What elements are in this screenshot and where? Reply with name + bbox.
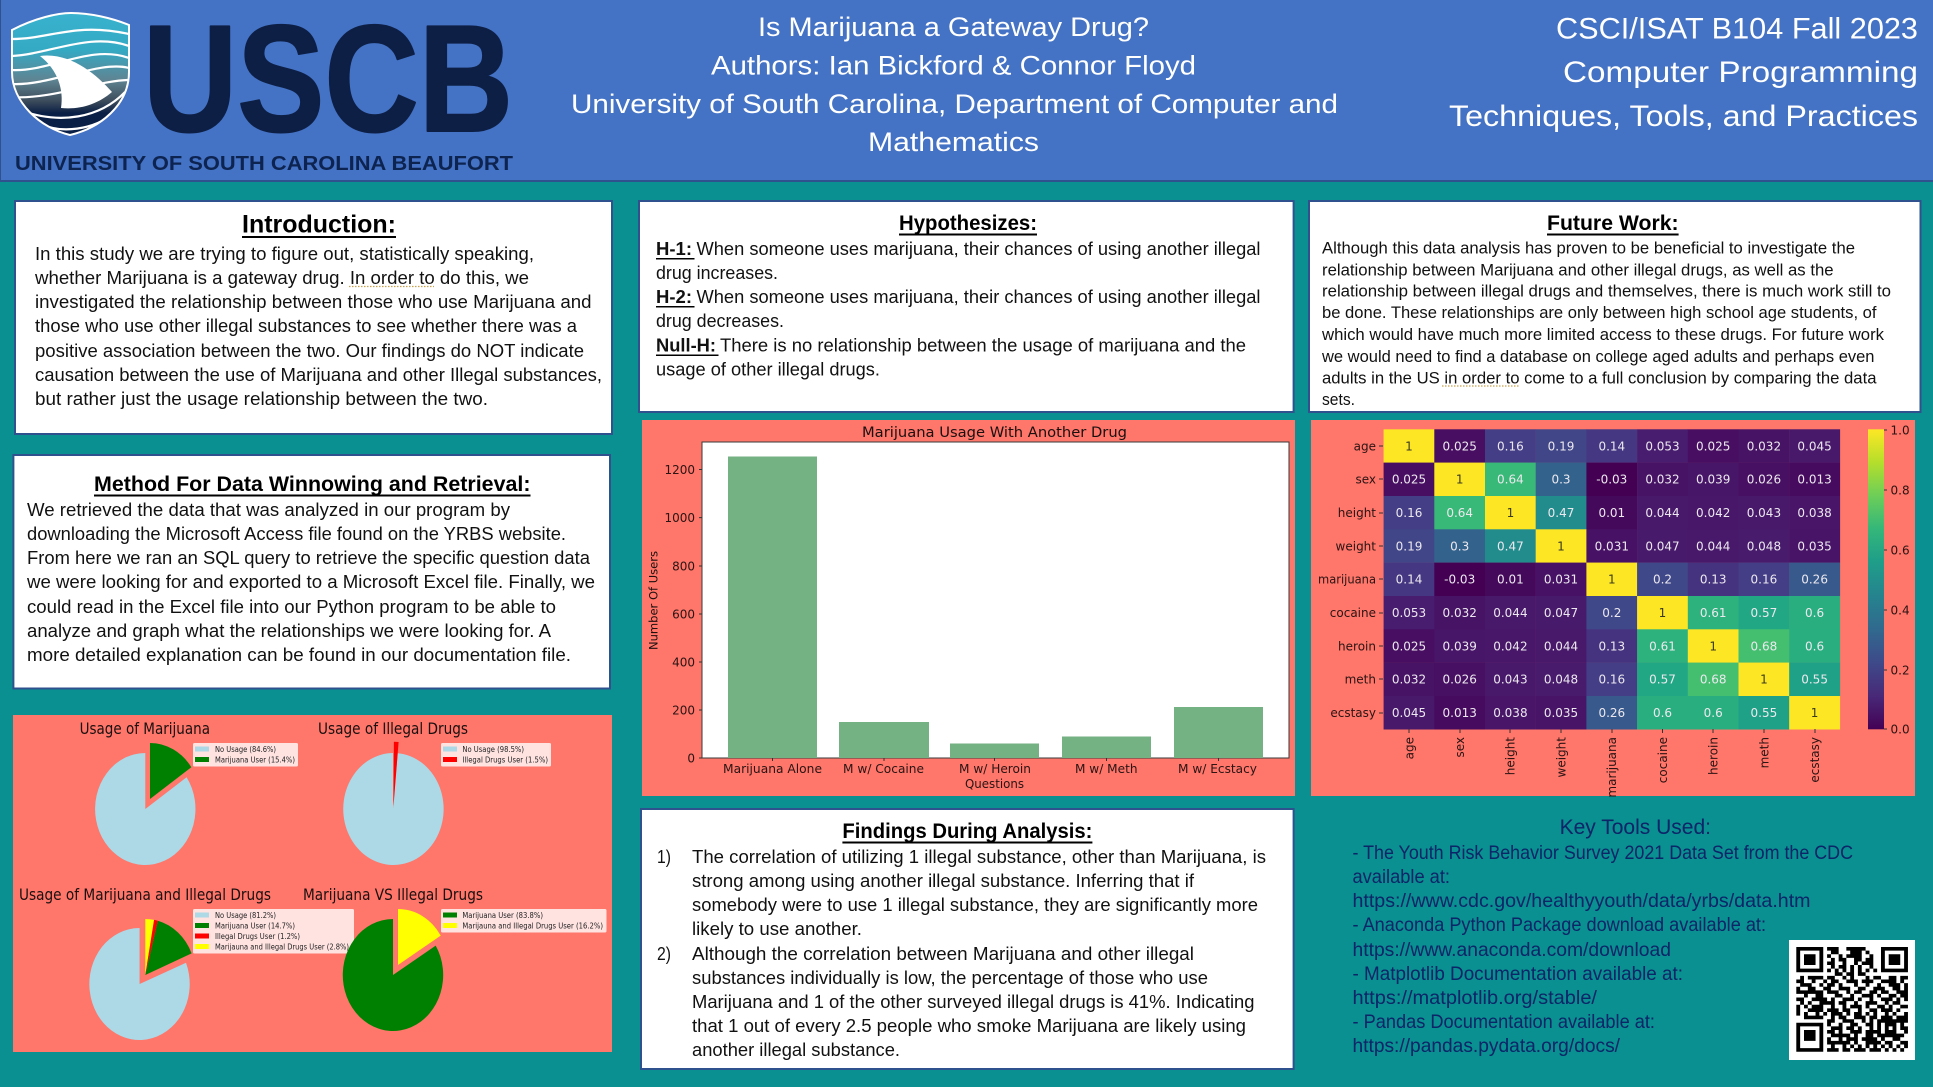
heatmap cells: 0.026 (1747, 473, 1781, 487)
method text: could read in the Excel file into our Python program to be able to (27, 596, 556, 617)
method text: analyze and graph what the relationships we were looking for. A (27, 620, 552, 641)
legend: usage of marijuana and illegal drugs: Illegal Drugs User (1.2%) (215, 932, 300, 941)
findings item 2: that 1 out of every 2.5 people who smoke Marijuana are likely using (692, 1015, 1246, 1036)
heatmap cells: 1 (1405, 439, 1413, 453)
heatmap cells: 0.039 (1443, 639, 1477, 653)
title and authors (571, 12, 1338, 157)
heatmap cells: 0.01 (1497, 573, 1524, 587)
heatmap color bar: 0.8 (1890, 484, 1910, 498)
heatmap cells: 0.044 (1645, 506, 1680, 520)
pie chart: marijuana vs illegal drugs (303, 885, 606, 1031)
hypotheses text: When someone uses marijuana, their chances of using another illegal (696, 238, 1260, 259)
heatmap cells: 0.044 (1696, 539, 1730, 553)
legend: usage of illegal drugs (441, 743, 551, 766)
heatmap cells: 0.035 (1797, 539, 1832, 553)
header banner (0, 0, 1933, 182)
heatmap cells: 0.2 (1602, 606, 1621, 620)
y axis labels: 200 (672, 704, 695, 718)
y axis labels: 0 (687, 752, 695, 766)
heatmap cells: 0.2 (1653, 573, 1672, 587)
tools list: https://pandas.pydata.org/docs/ (1352, 1035, 1621, 1057)
heatmap cells: 0.013 (1797, 473, 1832, 487)
heatmap color bar: 0.6 (1890, 544, 1910, 558)
y axis labels (664, 463, 695, 766)
panel: method (13, 455, 610, 688)
heatmap color bar: 0.0 (1890, 722, 1910, 736)
heatmap row labels: marijuana (1318, 573, 1376, 587)
method text: more detailed explanation can be found in our documentation file. (27, 644, 571, 665)
heatmap cells: 1 (1709, 639, 1717, 653)
title and authors: University of South Carolina, Department of Computer and (571, 89, 1338, 119)
bar chart plot area (699, 442, 1289, 761)
heatmap cells: 0.6 (1653, 706, 1672, 720)
method text (26, 499, 595, 665)
findings item 2: substances individually is low, the percentage of those who use (692, 967, 1208, 988)
findings item 2 (657, 943, 1254, 1060)
x axis labels: M w/ Cocaine (843, 762, 924, 776)
heatmap cells: 0.14 (1598, 439, 1625, 453)
heatmap row labels: heroin (1338, 639, 1376, 653)
heading: hypotheses: Hypothesizes: (899, 212, 1037, 235)
y axis labels: 1200 (664, 463, 695, 477)
heatmap cells: 0.053 (1392, 606, 1426, 620)
heatmap cells: 0.68 (1751, 639, 1777, 653)
heatmap cells: 0.26 (1598, 706, 1625, 720)
heatmap cells: 0.039 (1696, 473, 1730, 487)
introduction text: In this study we are trying to figure out, statistically speaking, (35, 243, 534, 264)
heatmap cells: 0.13 (1598, 639, 1625, 653)
heatmap column labels: height (1504, 737, 1518, 775)
heatmap cells: 0.038 (1493, 706, 1528, 720)
x axis labels: M w/ Ecstacy (1178, 762, 1257, 776)
findings item 2: Marijuana and 1 of the other surveyed illegal drugs is 41%. Indicating (692, 991, 1254, 1012)
heatmap cells: 0.57 (1649, 673, 1676, 687)
hypotheses text: Null-H: (656, 334, 716, 356)
introduction text: positive association between the two. Our findings do NOT indicate (35, 340, 584, 361)
course information (1449, 12, 1918, 133)
findings item 2: 2) (657, 943, 671, 964)
y axis labels: 600 (672, 608, 695, 622)
heatmap cells: 0.031 (1595, 539, 1629, 553)
method text: downloading the Microsoft Access file found on the YRBS website. (27, 523, 566, 544)
bars (728, 456, 1263, 758)
future work text (1321, 239, 1891, 409)
heatmap cells: 0.68 (1700, 673, 1727, 687)
heatmap cells: 0.044 (1544, 639, 1578, 653)
course information: Techniques, Tools, and Practices (1449, 100, 1918, 133)
heading: method: Method For Data Winnowing and Retrieval: (94, 472, 530, 496)
legend: usage of marijuana: No Usage (84.6%) (215, 745, 276, 754)
legend: marijuana vs illegal drugs (441, 909, 606, 932)
heatmap cells: 0.026 (1443, 673, 1477, 687)
y axis labels: 400 (672, 656, 695, 670)
heatmap cells: 1 (1456, 473, 1464, 487)
tools list: - Matplotlib Documentation available at: (1352, 963, 1683, 985)
heatmap cells: 0.57 (1751, 606, 1777, 620)
future work text: relationship between Marijuana and other illegal drugs, as well as the (1322, 261, 1834, 280)
future work text: Although this data analysis has proven to be beneficial to investigate the (1322, 239, 1855, 258)
heatmap cells: -0.03 (1444, 573, 1475, 587)
bar chart title: Marijuana Usage With Another Drug (862, 425, 1127, 441)
heatmap cells: 0.043 (1747, 506, 1781, 520)
legend: usage of illegal drugs: No Usage (98.5%) (462, 745, 524, 754)
heatmap cells: 0.16 (1497, 439, 1524, 453)
future work text: we would need to find a database on college aged adults and perhaps even (1321, 347, 1874, 366)
tools list: https://www.anaconda.com/download (1352, 939, 1671, 961)
logo subtitle: UNIVERSITY OF SOUTH CAROLINA BEAUFORT (15, 152, 513, 175)
title and authors: Is Marijuana a Gateway Drug? (758, 12, 1149, 42)
hypotheses text (656, 238, 1260, 380)
tools list: - Pandas Documentation available at: (1352, 1011, 1655, 1033)
hypotheses text: drug decreases. (656, 310, 784, 331)
heatmap cells: 1 (1760, 673, 1768, 687)
heatmap color bar: 1.0 (1890, 424, 1910, 438)
hypotheses text: When someone uses marijuana, their chances of using another illegal (696, 286, 1260, 307)
future work text: adults in the US in order to come to a full conclusion by comparing the data (1322, 369, 1877, 388)
heatmap row labels: age (1354, 439, 1376, 453)
heatmap cells: 0.048 (1544, 673, 1578, 687)
tools list: https://www.cdc.gov/healthyyouth/data/yrbs/data.htm (1352, 890, 1810, 912)
heatmap cells: 1 (1507, 506, 1514, 520)
x axis labels: Marijuana Alone (723, 762, 822, 776)
legend: marijuana vs illegal drugs: Marijauna and Illegal Drugs User (16.2%) (462, 922, 603, 931)
legend: usage of marijuana and illegal drugs: Marijuana User (14.7%) (215, 922, 295, 931)
x axis labels: M w/ Heroin (959, 762, 1031, 776)
legend: marijuana vs illegal drugs: Marijuana User (83.8%) (462, 911, 543, 920)
heatmap cells: 0.013 (1443, 706, 1477, 720)
heatmap cells: 0.19 (1396, 539, 1422, 553)
tools list: https://matplotlib.org/stable/ (1352, 987, 1598, 1009)
heatmap color bar: 0.2 (1890, 664, 1910, 678)
heatmap row labels: meth (1345, 673, 1376, 687)
heatmap cells: 0.55 (1751, 706, 1777, 720)
heatmap cells: 0.13 (1700, 573, 1727, 587)
heatmap cells: 0.025 (1443, 439, 1477, 453)
panel: future work (1309, 201, 1920, 412)
heatmap cells: 0.042 (1493, 639, 1528, 653)
heatmap cells: 0.044 (1493, 606, 1528, 620)
heading: introduction: Introduction: (242, 210, 396, 238)
heatmap cells: 0.16 (1396, 506, 1422, 520)
heatmap cells: -0.03 (1596, 473, 1627, 487)
heatmap cells: 0.053 (1645, 439, 1680, 453)
heatmap cells: 0.61 (1700, 606, 1727, 620)
introduction text: those who use other illegal substances to see whether there was a (35, 315, 578, 336)
heatmap column labels: ecstasy (1808, 737, 1822, 783)
future work text: which would have much more limited access to these drugs. For future work (1321, 325, 1884, 344)
heatmap cells: 0.045 (1797, 439, 1832, 453)
pie chart: marijuana vs illegal drugs: Marijuana VS Illegal Drugs (303, 885, 483, 904)
pie chart: usage of illegal drugs (318, 719, 551, 865)
introduction text: investigated the relationship between those who use Marijuana and (35, 291, 591, 312)
heatmap cells: 0.01 (1598, 506, 1625, 520)
introduction text (34, 243, 602, 409)
heatmap cells: 0.032 (1645, 473, 1680, 487)
panel: correlation heatmap (1311, 420, 1915, 798)
heatmap row labels: weight (1336, 539, 1376, 553)
pie chart: usage of marijuana (80, 719, 298, 865)
panel: key tools used (1352, 816, 1853, 1057)
heatmap cells: 0.55 (1801, 673, 1828, 687)
hypotheses text: drug increases. (656, 262, 778, 283)
tools list (1352, 842, 1853, 1057)
heatmap cells: 0.16 (1751, 573, 1777, 587)
heatmap column labels (1402, 737, 1822, 798)
heatmap column labels: heroin (1706, 737, 1720, 775)
future work text: sets. (1322, 390, 1355, 409)
findings item 2: another illegal substance. (692, 1039, 900, 1060)
heatmap row labels: sex (1355, 473, 1376, 487)
legend: usage of marijuana and illegal drugs (193, 909, 354, 954)
introduction text: but rather just the usage relationship between the two. (35, 388, 488, 409)
heatmap cells: 0.025 (1392, 473, 1426, 487)
heatmap cells: 0.032 (1747, 439, 1781, 453)
findings item 1: strong among using another illegal substance. Inferring that if (692, 870, 1195, 891)
legend: usage of illegal drugs: Illegal Drugs User (1.5%) (462, 756, 548, 764)
findings item 1 (657, 846, 1266, 939)
panel: bar chart (642, 420, 1295, 796)
heatmap cells: 0.19 (1548, 439, 1574, 453)
method text: We retrieved the data that was analyzed in our program by (27, 499, 511, 520)
method text: we were looking for and exported to a Microsoft Excel file. Finally, we (26, 571, 595, 592)
heatmap cells: 0.043 (1493, 673, 1528, 687)
findings item 1: The correlation of utilizing 1 illegal substance, other than Marijuana, is (692, 846, 1266, 867)
legend: usage of marijuana (193, 743, 298, 766)
legend: usage of marijuana: Marijuana User (15.4%) (215, 756, 295, 764)
title and authors: Authors: Ian Bickford & Connor Floyd (711, 50, 1196, 80)
heatmap row labels: cocaine (1330, 606, 1376, 620)
heatmap cells: 0.035 (1544, 706, 1578, 720)
pie chart: usage of marijuana and illegal drugs (19, 885, 354, 1040)
heatmap cells: 0.047 (1544, 606, 1578, 620)
heatmap cells: 0.025 (1696, 439, 1730, 453)
future work text: be done. These relationships are only between high school age students, of (1322, 303, 1877, 322)
panel: pie charts (13, 715, 612, 1052)
x axis labels: Questions (965, 777, 1024, 791)
heatmap row labels: height (1338, 506, 1376, 520)
heatmap cells: 0.048 (1747, 539, 1781, 553)
hypotheses text: usage of other illegal drugs. (656, 358, 880, 380)
course information: Computer Programming (1563, 56, 1918, 89)
heatmap cells: 0.64 (1446, 506, 1473, 520)
heatmap column labels: age (1402, 737, 1416, 759)
heatmap cells: 0.6 (1805, 639, 1824, 653)
findings item 1: 1) (657, 846, 671, 867)
heatmap cells: 0.6 (1704, 706, 1723, 720)
heading: future work: Future Work: (1547, 212, 1679, 235)
heatmap cells: 0.032 (1392, 673, 1426, 687)
pie chart: usage of marijuana: Usage of Marijuana (80, 719, 210, 738)
panel: hypotheses (639, 201, 1294, 412)
heatmap column labels: marijuana (1605, 737, 1619, 798)
x axis labels: M w/ Meth (1075, 762, 1138, 776)
heatmap row labels: ecstasy (1330, 706, 1376, 720)
legend: usage of marijuana and illegal drugs: No Usage (81.2%) (215, 911, 276, 920)
findings item 1: likely to use another. (692, 918, 862, 939)
icon: QR code (1789, 940, 1915, 1060)
panel: introduction (15, 201, 612, 434)
findings item 1: somebody were to use 1 illegal substance, they are significantly more (692, 894, 1258, 915)
x axis labels (723, 762, 1257, 791)
y axis labels: 1000 (664, 511, 695, 525)
heatmap cells: 0.3 (1551, 473, 1571, 487)
heatmap cells: 0.47 (1497, 539, 1524, 553)
heading: findings: Findings During Analysis: (842, 820, 1092, 843)
heatmap cells: 1 (1557, 539, 1565, 553)
future work text: relationship between illegal drugs and themselves, there is much work still to (1322, 282, 1891, 300)
findings item 2: Although the correlation between Marijuana and other illegal (692, 943, 1194, 964)
heatmap cells: 0.032 (1443, 606, 1477, 620)
y axis labels: 800 (672, 560, 695, 574)
heatmap cells (1384, 429, 1840, 730)
course information: CSCI/ISAT B104 Fall 2023 (1556, 12, 1918, 46)
introduction text: whether Marijuana is a gateway drug. In order to do this, we (34, 267, 529, 288)
hypotheses text: There is no relationship between the usage of marijuana and the (720, 334, 1246, 356)
title and authors: Mathematics (868, 127, 1039, 157)
hypotheses text: H-2: (656, 286, 692, 307)
tools list: - Anaconda Python Package download available at: (1352, 914, 1766, 936)
heatmap row labels (1318, 439, 1376, 720)
pie chart: usage of illegal drugs: Usage of Illegal Drugs (318, 719, 468, 738)
heatmap cells: 0.038 (1797, 506, 1832, 520)
heatmap cells: 0.14 (1396, 573, 1422, 587)
tools list: available at: (1352, 866, 1450, 888)
heatmap cells: 1 (1811, 706, 1818, 720)
tools list: - The Youth Risk Behavior Survey 2021 Data Set from the CDC (1352, 842, 1853, 864)
heatmap column labels: meth (1758, 737, 1772, 768)
heatmap color bar (1868, 424, 1910, 736)
heatmap cells: 0.025 (1392, 639, 1426, 653)
heatmap cells: 0.61 (1649, 639, 1676, 653)
heatmap cells: 0.031 (1544, 573, 1578, 587)
heatmap color bar: 0.4 (1890, 604, 1910, 618)
heatmap cells: 1 (1659, 606, 1666, 620)
heatmap cells: 0.16 (1598, 673, 1625, 687)
panel: findings (641, 809, 1294, 1069)
heatmap cells: 0.047 (1645, 539, 1680, 553)
heading: key tools: Key Tools Used: (1560, 816, 1711, 839)
heatmap cells: 0.3 (1450, 539, 1469, 553)
heatmap cells: 0.045 (1392, 706, 1426, 720)
heatmap column labels: sex (1453, 737, 1467, 758)
y axis title: Number Of Users (646, 551, 660, 650)
heatmap cells: 0.26 (1801, 573, 1828, 587)
heatmap cells: 0.6 (1805, 606, 1824, 620)
pie chart: usage of marijuana and illegal drugs: Usage of Marijuana and Illegal Drugs (19, 885, 271, 904)
introduction text: causation between the use of Marijuana and other Illegal substances, (35, 364, 602, 385)
heatmap column labels: weight (1554, 737, 1568, 777)
heatmap cells: 0.47 (1548, 506, 1574, 520)
hypotheses text: H-1: (656, 238, 692, 259)
legend: usage of marijuana and illegal drugs: Marijauna and Illegal Drugs User (2.8%) (215, 943, 349, 952)
heatmap cells: 0.64 (1497, 473, 1524, 487)
logo shield (12, 13, 129, 135)
method text: From here we ran an SQL query to retrieve the specific question data (27, 547, 591, 568)
heatmap column labels: cocaine (1656, 737, 1670, 783)
heatmap cells: 1 (1608, 573, 1616, 587)
logo: USCB (12, 0, 513, 175)
heatmap cells: 0.042 (1696, 506, 1730, 520)
